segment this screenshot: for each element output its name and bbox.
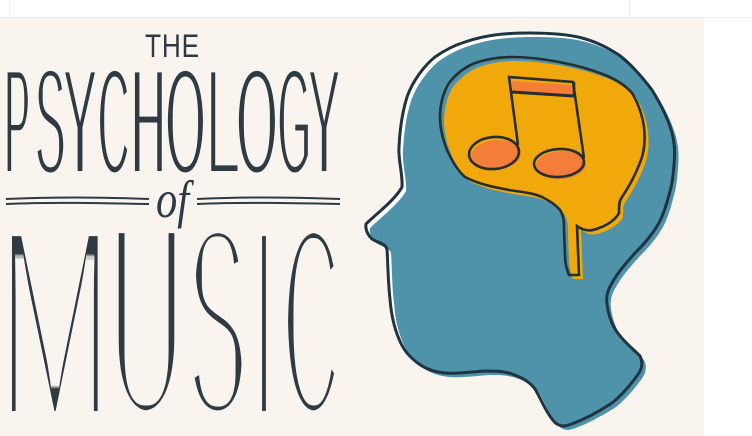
heading: PSYCHOLOGY: L <box>205 36 241 207</box>
heading: PSYCHOLOGY: Y <box>63 38 97 207</box>
heading: PSYCHOLOGY: O <box>165 37 205 207</box>
divider with script "of": of <box>156 171 194 229</box>
heading: PSYCHOLOGY: H <box>131 36 166 206</box>
divider with script "of" <box>6 171 340 229</box>
brain yellow fill <box>444 61 649 279</box>
heading: PSYCHOLOGY: S <box>35 36 65 207</box>
heading: PSYCHOLOGY: C <box>98 37 130 207</box>
heading: PSYCHOLOGY: G <box>278 37 311 207</box>
heading: PSYCHOLOGY: O <box>236 38 278 207</box>
head outline <box>366 33 675 426</box>
head white underlay <box>367 34 676 427</box>
heading: PSYCHOLOGY <box>4 36 340 207</box>
brain outline <box>440 57 645 275</box>
icon: music note <box>468 77 587 180</box>
heading: PSYCHOLOGY: Y <box>308 37 340 206</box>
heading: THE: THE <box>145 30 200 65</box>
head blue fill <box>370 37 679 430</box>
illustration: head with brain and music note <box>366 33 679 430</box>
heading: MUSIC <box>0 166 340 436</box>
heading: PSYCHOLOGY: P <box>4 38 30 207</box>
